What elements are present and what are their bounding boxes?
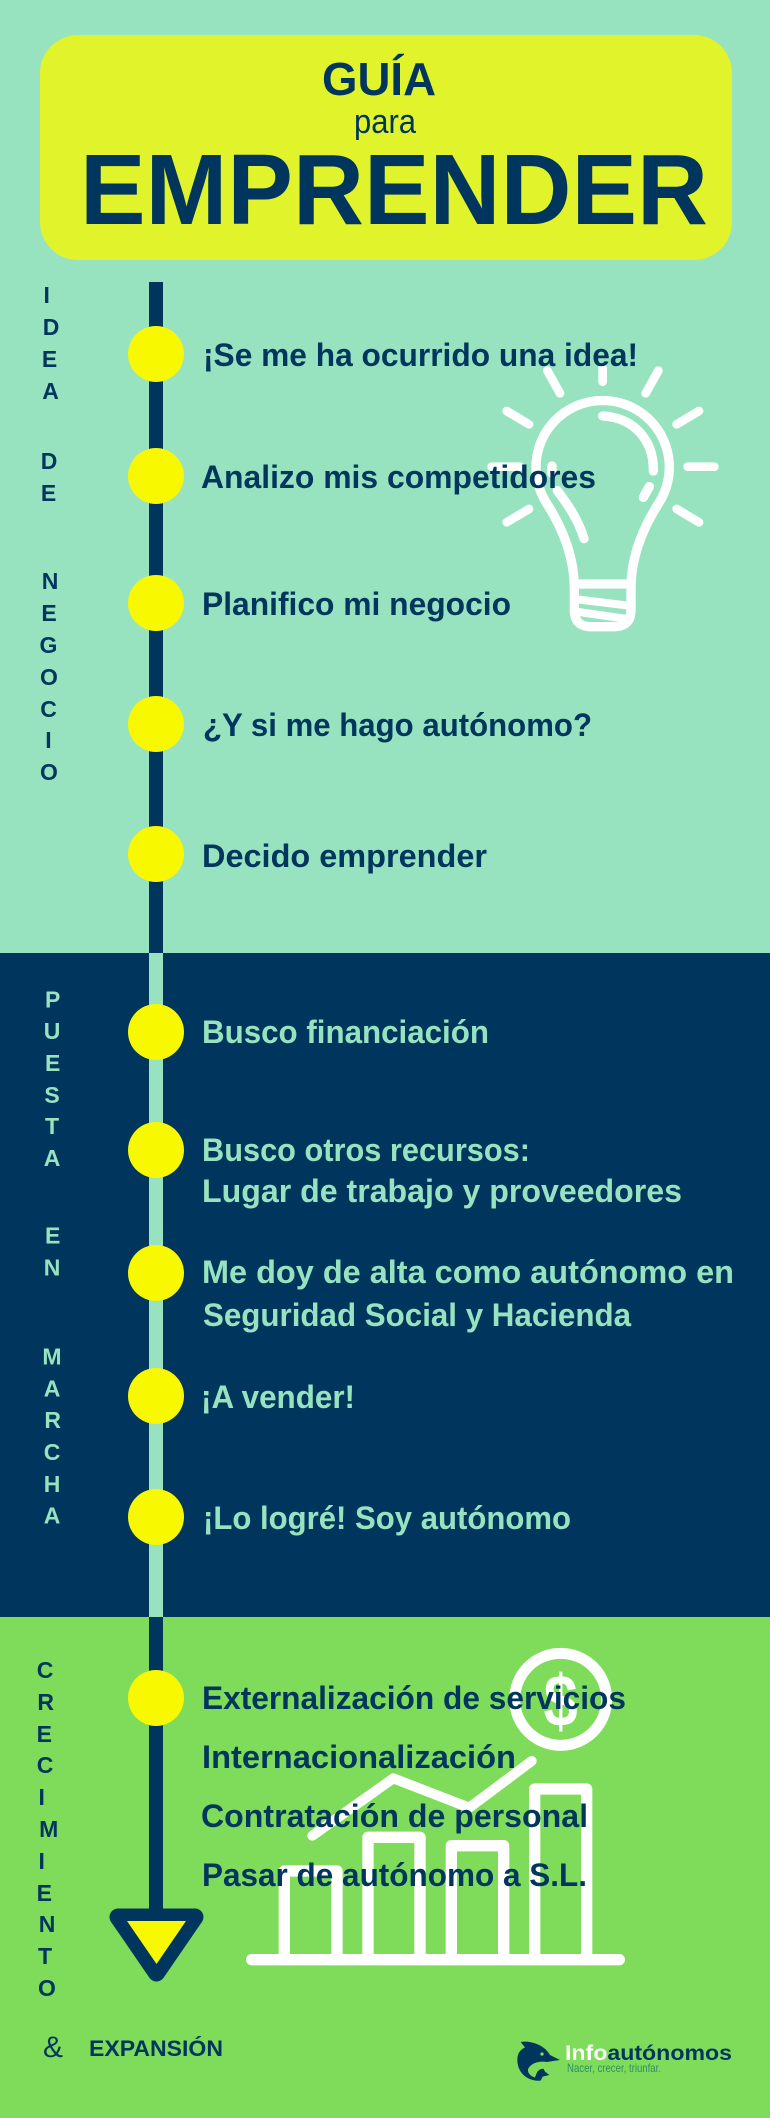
panel: crecimiento y expansión background bbox=[0, 1617, 770, 2118]
step: alta: Seguridad Social y Hacienda bbox=[203, 1297, 631, 1333]
panel: idea de negocio background bbox=[0, 0, 770, 953]
vertical label: puesta en marcha bbox=[42, 986, 62, 1528]
vertical label: puesta en marcha: EN bbox=[44, 1222, 60, 1280]
timeline markers bbox=[128, 326, 184, 1726]
step: idea: ¡Se me ha ocurrido una idea! bbox=[203, 337, 638, 373]
vertical label: idea de negocio bbox=[40, 282, 59, 785]
vertical label: puesta en marcha: MARCHA bbox=[42, 1344, 62, 1528]
step: otros recursos: Busco otros recursos: bbox=[202, 1132, 530, 1168]
step: competidores: Analizo mis competidores bbox=[201, 459, 596, 495]
vertical label: idea de negocio: DE bbox=[41, 448, 57, 506]
step: vender: ¡A vender! bbox=[201, 1379, 355, 1415]
step: financiación: Busco financiación bbox=[202, 1014, 489, 1050]
icon: dolphin bbox=[517, 2042, 560, 2081]
step: pasar a S.L.: Pasar de autónomo a S.L. bbox=[202, 1857, 587, 1893]
step: otros recursos: Lugar de trabajo y proveedores bbox=[202, 1173, 682, 1209]
step: alta: Me doy de alta como autónomo en bbox=[202, 1254, 734, 1290]
logo tagline: Nacer, crecer, triunfar. bbox=[567, 2061, 661, 2075]
step: autónomo: ¿Y si me hago autónomo? bbox=[203, 707, 592, 743]
vertical label: idea de negocio: IDEA bbox=[42, 282, 59, 404]
step: contratación: Contratación de personal bbox=[201, 1798, 588, 1834]
icon: growth bar chart with coin: $ bbox=[544, 1660, 578, 1742]
step: decido: Decido emprender bbox=[202, 838, 487, 874]
title: guía: GUÍA bbox=[322, 53, 436, 105]
icon: growth bar chart with coin bbox=[252, 1653, 619, 1960]
step: otros recursos bbox=[202, 1132, 682, 1209]
label: expansión: EXPANSIÓN bbox=[89, 2036, 223, 2061]
vertical label: idea de negocio: NEGOCIO bbox=[40, 568, 58, 785]
step: logré: ¡Lo logré! Soy autónomo bbox=[203, 1500, 571, 1536]
arrow head bbox=[118, 1917, 195, 1973]
title banner bbox=[40, 35, 732, 260]
logo wordmark: Infoautónomos bbox=[565, 2042, 732, 2065]
vertical label: puesta en marcha: PUESTA bbox=[44, 986, 60, 1171]
logo: infoautónomos bbox=[517, 2042, 732, 2081]
step: planifico: Planifico mi negocio bbox=[202, 586, 511, 622]
vertical label: crecimiento: CRECIMIENTO bbox=[37, 1657, 58, 2001]
title: emprender: EMPRENDER bbox=[80, 134, 708, 246]
step: alta bbox=[202, 1254, 734, 1333]
panel: puesta en marcha background bbox=[0, 953, 770, 1617]
step: externalización: Externalización de servicios bbox=[202, 1680, 626, 1716]
icon: light bulb bbox=[492, 368, 714, 627]
label: ampersand: & bbox=[43, 2031, 63, 2064]
title: para: para bbox=[354, 103, 416, 141]
step: internacionalización: Internacionalización bbox=[202, 1739, 516, 1775]
timeline line bbox=[149, 282, 163, 1917]
